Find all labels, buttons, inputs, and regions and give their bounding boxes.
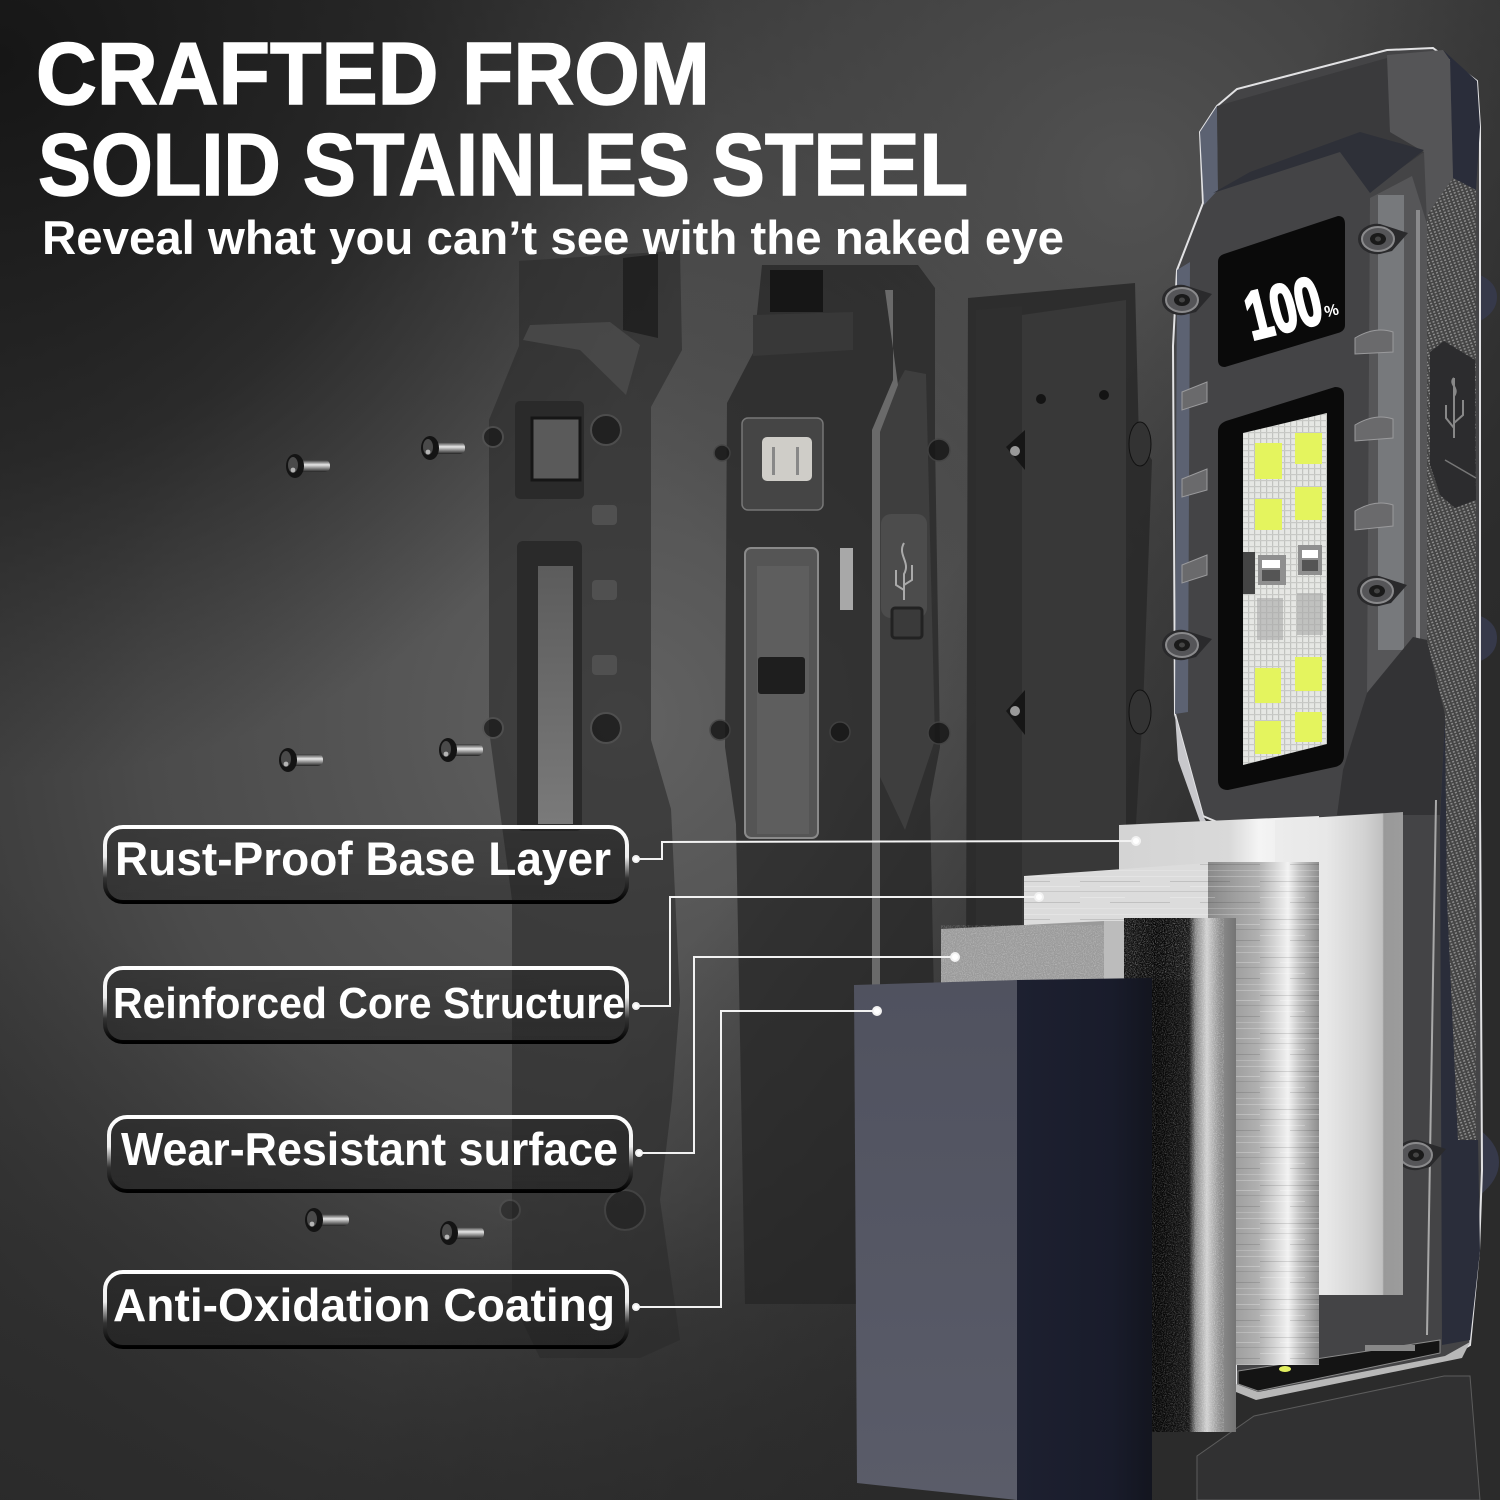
flashlight display: [1218, 216, 1345, 367]
screw: middle left: [279, 748, 323, 772]
ghost exploded layer: front shell: [483, 250, 682, 1358]
screw: lower left: [305, 1208, 349, 1232]
label: rust-proof base layer: Rust-Proof Base Layer: [115, 832, 611, 885]
title: CRAFTED FROM: [36, 24, 710, 123]
label: wear-resistant surface: Wear-Resistant surface: [121, 1123, 618, 1175]
screw: lower right: [440, 1221, 484, 1245]
ghost exploded layer: inner frame: [710, 265, 950, 1304]
LED centre switches: [1243, 545, 1322, 594]
material layer: navy anti-oxidation plate: [854, 978, 1152, 1500]
label: rust-proof base layer: [105, 827, 627, 902]
flashlight top block: [1217, 58, 1424, 190]
leader line: wear-resistant surface: [636, 953, 959, 1156]
screw: middle right: [439, 738, 483, 762]
flashlight LED panel: [1218, 387, 1344, 790]
label: reinforced core structure: Reinforced Core Structure: [113, 979, 625, 1028]
flashlight base plate: [1236, 1340, 1470, 1400]
flashlight dark shoulder band: [1213, 132, 1424, 193]
ghost exploded layer: rear shell: [965, 283, 1152, 1304]
label: anti-oxidation coating: [105, 1272, 627, 1347]
flashlight raised side column: [1367, 176, 1427, 693]
flashlight USB cover: [1430, 341, 1476, 508]
label: wear-resistant surface: [109, 1117, 631, 1191]
flashlight lower dark wedge: [1337, 637, 1445, 815]
flashlight lower bevel: [1175, 714, 1240, 880]
screw: top right: [421, 436, 465, 460]
flashlight lower rail highlight: [1427, 800, 1436, 1335]
LED circuit traces: [1257, 593, 1323, 640]
flashlight navy left bevel: [1175, 106, 1218, 714]
subtitle: Reveal what you can’t see with the naked eye: [42, 211, 1064, 264]
flashlight knurled grip: [1427, 178, 1476, 1140]
flashlight grip tabs: [1182, 330, 1393, 583]
material layer: white base plate: [1119, 812, 1403, 1295]
flashlight: assembled product: [1162, 48, 1499, 1500]
title: SOLID STAINLES STEEL: [38, 115, 968, 214]
battery readout: %: [1323, 301, 1341, 321]
screw: top left: [286, 454, 330, 478]
material layer: textured wear surface: [941, 918, 1236, 1432]
title: [36, 24, 968, 214]
flashlight bolts: [1162, 224, 1446, 1170]
flashlight reflection: [1197, 1376, 1480, 1500]
LED chips: [1255, 433, 1322, 754]
material layer: brushed core plate: [1024, 862, 1319, 1365]
flashlight body: [1173, 48, 1482, 1395]
flashlight lower navy rail: [1440, 714, 1480, 1345]
label: reinforced core structure: [105, 968, 627, 1042]
leader line: reinforced core structure: [633, 893, 1043, 1009]
flashlight side bumps: [1478, 274, 1499, 1195]
leader line: anti-oxidation coating: [633, 1007, 881, 1310]
battery readout: 100: [1237, 262, 1330, 355]
leader line: rust-proof base layer: [633, 837, 1140, 862]
flashlight navy top rail: [1443, 50, 1480, 190]
label: anti-oxidation coating: Anti-Oxidation Coating: [113, 1279, 615, 1331]
